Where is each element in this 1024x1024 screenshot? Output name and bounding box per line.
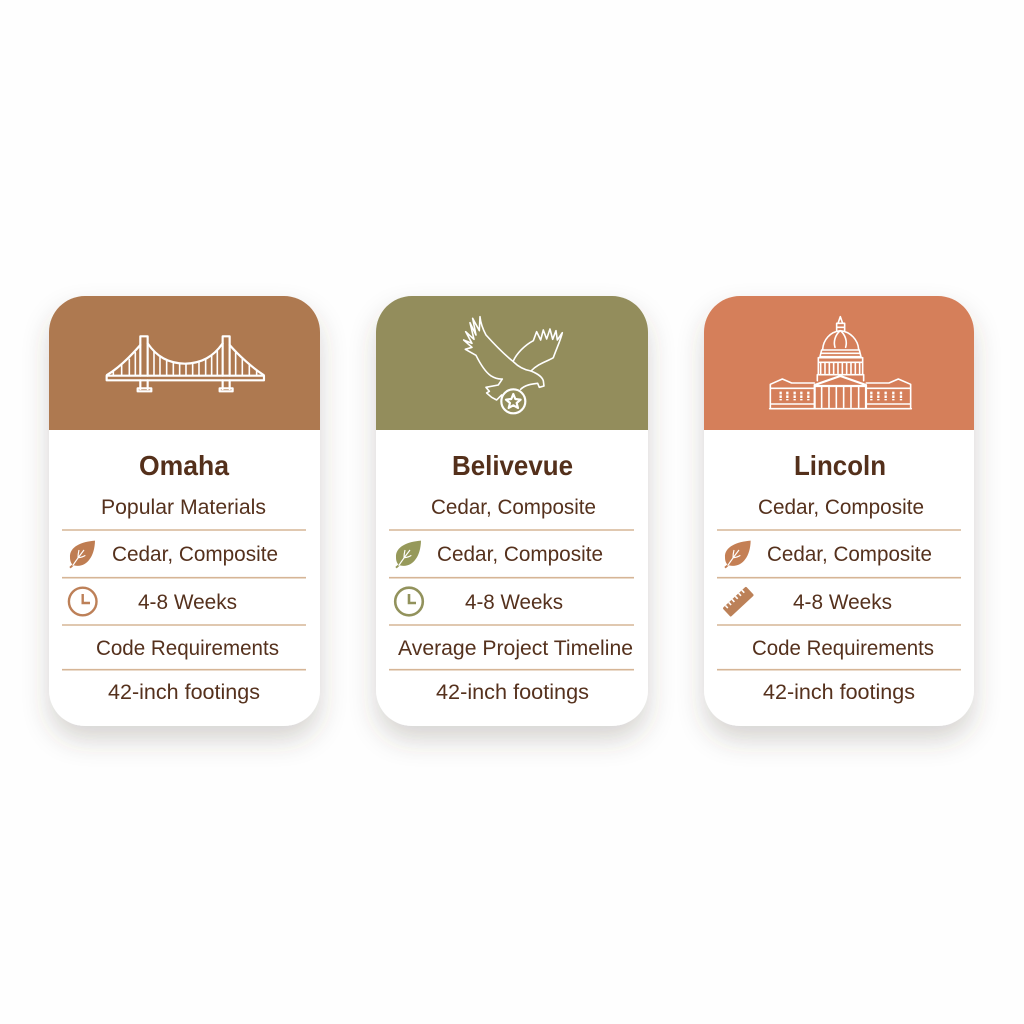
text: Cedar, Composite heading: Cedar, Composite <box>758 496 924 519</box>
panel: Belivevue card <box>376 296 648 726</box>
text: Cedar, Composite heading: Cedar, Composite <box>431 496 596 519</box>
icon: ruler <box>723 586 754 617</box>
title: Lincoln: Lincoln <box>794 450 886 481</box>
title: Belivevue: Belivevue <box>452 450 573 481</box>
text: 4-8 Weeks: 4-8 Weeks <box>465 591 563 614</box>
icon: leaf <box>724 541 751 568</box>
icon: clock <box>69 588 96 615</box>
icon: bridge <box>107 336 264 391</box>
title: Omaha: Omaha <box>139 450 229 481</box>
header: Omaha <box>49 296 320 430</box>
header: Lincoln <box>704 296 974 430</box>
text: Cedar, Composite: Cedar, Composite <box>437 543 603 566</box>
text: Cedar, Composite: Cedar, Composite <box>112 543 278 566</box>
icon: eagle <box>464 317 562 413</box>
text: Average Project Timeline: Average Project Timeline <box>398 637 633 660</box>
text: Cedar, Composite: Cedar, Composite <box>767 543 932 566</box>
text: 42-inch footings: 42-inch footings <box>763 681 915 704</box>
text: Code Requirements: Code Requirements <box>96 637 279 660</box>
panel: Lincoln card <box>704 296 974 726</box>
text: Code Requirements: Code Requirements <box>752 637 934 660</box>
text: 42-inch footings: 42-inch footings <box>108 681 260 704</box>
icon: capitol <box>770 317 911 409</box>
icon: leaf <box>395 541 421 568</box>
text: Popular Materials: Popular Materials <box>101 496 266 519</box>
icon: leaf <box>69 541 95 568</box>
text: 42-inch footings: 42-inch footings <box>436 681 589 704</box>
header: Belivevue <box>376 296 648 430</box>
panel: Omaha card <box>49 296 320 726</box>
text: 4-8 Weeks: 4-8 Weeks <box>138 591 237 614</box>
icon: clock <box>395 588 423 615</box>
text: 4-8 Weeks: 4-8 Weeks <box>793 591 892 614</box>
